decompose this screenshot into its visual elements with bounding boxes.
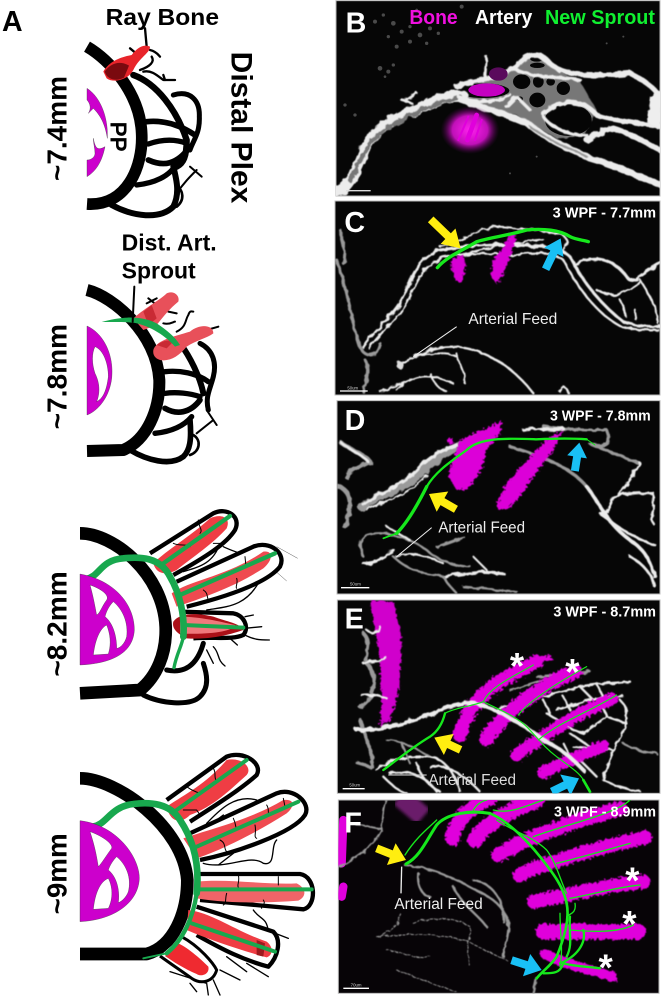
finger 5 [160, 937, 217, 982]
timepoint label: 3 WPF - 8.9mm [554, 805, 656, 821]
label: ~8.2mm: ~8.2mm [42, 571, 73, 677]
bone [448, 421, 563, 510]
panel: B bone and artery micrograph [336, 1, 662, 196]
legend: Bone Artery New Sprout: Artery [475, 7, 532, 29]
vessels [338, 427, 655, 593]
schematic: vessels [87, 28, 202, 215]
panel: A ~8.2mm schematic [42, 511, 298, 703]
label: C: C [344, 207, 365, 239]
vessels [337, 227, 660, 393]
label: D: D [345, 405, 365, 437]
label: E: E [345, 604, 364, 636]
asterisks: * [510, 646, 525, 687]
schematic: green sprout [93, 760, 312, 958]
scale bar [340, 385, 368, 391]
schematic: ray bone [103, 46, 150, 81]
vessels [338, 53, 662, 192]
scale bar [343, 982, 369, 988]
cyan arrow [510, 954, 542, 976]
asterisks [599, 860, 640, 988]
label: Arterial Feed: Arterial Feed [468, 311, 557, 328]
panel: A ~7.8mm schematic [42, 230, 218, 462]
bone fingers [453, 798, 645, 977]
asterisks: * [599, 947, 614, 988]
schematic: pectoral plate [80, 821, 139, 922]
scale bar: 50um [349, 783, 361, 788]
schematic: arc and vessels [80, 778, 288, 995]
finger 3 [197, 874, 313, 909]
vessel lumens [457, 55, 592, 136]
speckle haze [343, 5, 624, 174]
new sprout [405, 800, 640, 978]
label: F: F [344, 808, 362, 840]
finger 3 [173, 612, 246, 639]
bone [441, 67, 508, 154]
asterisks: * [622, 903, 637, 944]
pointer line [388, 774, 427, 776]
pointer line [133, 287, 134, 322]
label: B: B [346, 7, 366, 39]
panel: D 3 WPF 7.8mm micrograph [337, 401, 660, 594]
schematic: pectoral plate [87, 88, 107, 177]
scale bar [346, 189, 371, 193]
vessels front [357, 627, 583, 793]
new sprout [383, 439, 595, 538]
new sprout [383, 665, 617, 792]
panel: A ~9mm schematic [42, 755, 313, 995]
label: Dist. Art. Sprout [122, 230, 217, 283]
schematic: pectoral plate [80, 574, 134, 665]
label: Arterial Feed: Arterial Feed [394, 896, 483, 913]
legend: Bone Artery New Sprout: Bone [409, 7, 458, 29]
asterisks: * [625, 860, 640, 901]
scale bar [341, 582, 369, 588]
pointer line [413, 327, 457, 357]
faint bone left [342, 797, 423, 897]
label: Dist. Art. Sprout: Dist. Art. [122, 230, 217, 256]
heading: Ray Bone: Ray Bone [106, 4, 219, 30]
pointer line [400, 866, 402, 894]
label: Arterial Feed: Arterial Feed [428, 772, 516, 789]
schematic: green sprout [86, 516, 275, 668]
schematic: green sprout [102, 318, 180, 347]
label: Arterial Feed: Arterial Feed [438, 519, 525, 536]
finger 2 [172, 545, 282, 607]
scale bar [343, 783, 365, 789]
pointer line [397, 528, 432, 557]
timepoint label: 3 WPF - 8.7mm [553, 605, 656, 621]
yellow arrow [428, 216, 461, 248]
schematic: arc and vessels [80, 533, 298, 703]
label: ~7.8mm: ~7.8mm [42, 324, 73, 429]
asterisks [510, 646, 580, 693]
panel: F 3 WPF 8.9mm micrograph [338, 797, 659, 993]
schematic: vessels [87, 290, 218, 462]
scale bar: 50um [350, 582, 361, 587]
finger 1 [150, 511, 237, 575]
label: ~9mm: ~9mm [42, 833, 73, 914]
yellow arrow [429, 492, 458, 513]
panel: A ~7.4mm schematic [42, 4, 258, 215]
label: PP: PP [105, 122, 131, 152]
cyan arrow [542, 238, 564, 271]
panel: C 3 WPF 7.7mm micrograph [335, 201, 660, 395]
schematic: pectoral plate [87, 326, 112, 415]
label: Dist. Art. Sprout: Sprout [122, 257, 196, 283]
label: Distal Plex: Distal Plex [225, 52, 258, 204]
cyan arrow [567, 442, 587, 472]
bone [452, 233, 517, 284]
panel: E 3 WPF 8.7mm micrograph [337, 600, 660, 802]
cyan arrow [550, 774, 579, 794]
asterisks: * [565, 652, 580, 693]
yellow arrow [434, 734, 462, 755]
dim vessels [340, 800, 537, 993]
timepoint label: 3 WPF - 7.7mm [553, 205, 656, 221]
finger 1 [167, 755, 258, 822]
new sprout [437, 229, 588, 268]
scale bar: 70um [351, 982, 362, 987]
finger 2 [183, 792, 306, 860]
legend: Bone Artery New Sprout [409, 7, 655, 29]
vessels behind bone [358, 633, 657, 792]
schematic: ray bones [133, 292, 213, 360]
scale bar: 50um [347, 385, 359, 390]
yellow arrow [375, 843, 406, 865]
panel letter A: A [2, 6, 23, 38]
timepoint label: 3 WPF - 7.8mm [550, 409, 651, 425]
label: ~7.4mm: ~7.4mm [42, 76, 73, 181]
finger 4 [187, 907, 278, 967]
legend: Bone Artery New Sprout: New Sprout [545, 7, 655, 29]
bone [370, 600, 612, 773]
